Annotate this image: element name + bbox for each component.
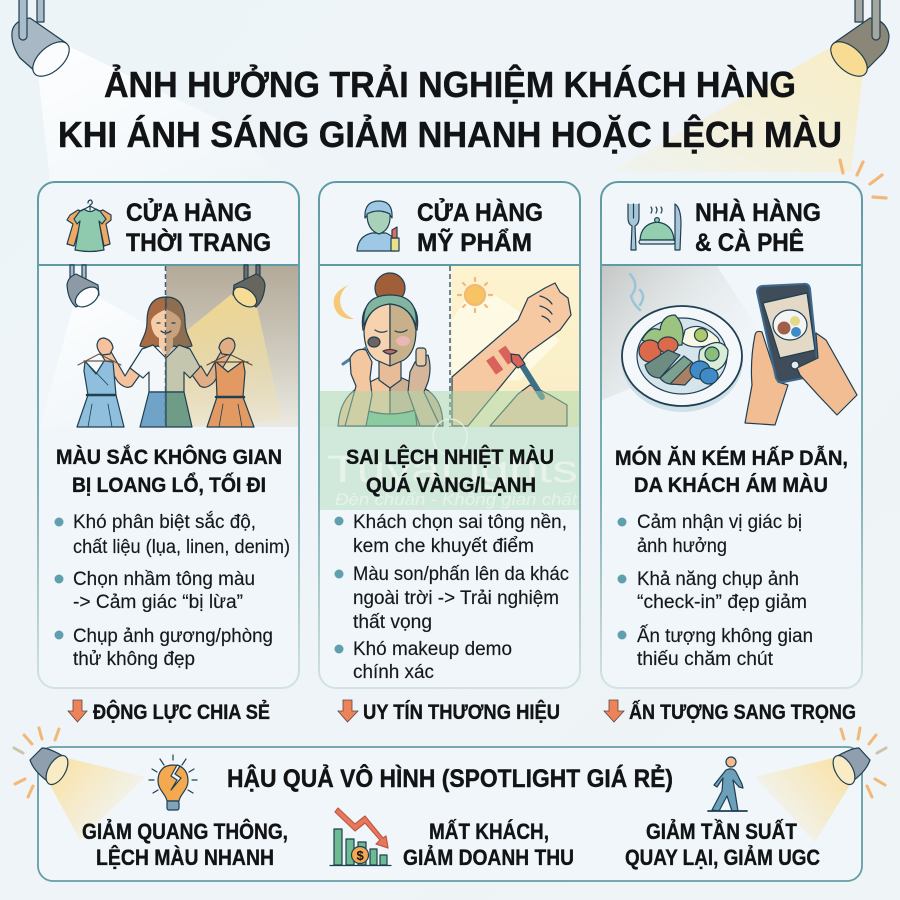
bullet list: “check-in” đẹp giảm — [637, 592, 807, 613]
shirt — [130, 345, 166, 392]
subheading — [346, 445, 554, 497]
bullet list: Chụp ảnh gương/phòng — [73, 626, 273, 647]
header text: CỬA HÀNG — [417, 197, 543, 227]
header text: NHÀ HÀNG — [695, 198, 821, 227]
bullet list: Khó makeup demo — [353, 639, 512, 660]
bullet list: Khó phân biệt sắc độ, — [73, 511, 256, 533]
bullet list: -> Cảm giác “bị lừa” — [73, 592, 243, 613]
bullet list: ngoài trời -> Trải nghiệm — [353, 588, 559, 609]
subheading: DA KHÁCH ÁM MÀU — [634, 474, 828, 497]
header text: THỜI TRANG — [126, 227, 271, 257]
subheading: QUÁ VÀNG/LẠNH — [366, 474, 536, 497]
face and neck — [151, 309, 166, 358]
icon: sun rays near title — [840, 160, 886, 198]
bullet list — [334, 512, 569, 683]
bullet list: Khả năng chụp ảnh — [637, 569, 799, 590]
image background: warm side — [451, 266, 579, 427]
icon: rays left — [14, 728, 59, 797]
bullet list — [618, 512, 813, 670]
callout: brand motivation drops: ĐỘNG LỰC CHIA SẺ — [93, 700, 270, 724]
bullet list: Ấn tượng không gian — [637, 625, 813, 647]
image background: warm side — [166, 265, 298, 427]
icon: face and lipstick — [357, 201, 399, 251]
consequence: luminous flux: GIẢM QUANG THÔNG, — [82, 819, 288, 844]
bullet list: Cảm nhận vị giác bị — [637, 512, 802, 533]
skirt — [140, 392, 166, 427]
arm right — [190, 350, 231, 387]
bullet list: chính xác — [353, 662, 434, 683]
sun — [458, 278, 492, 312]
consequence: luminous flux: LỆCH MÀU NHANH — [96, 845, 274, 870]
consequence: return frequency: GIẢM TẦN SUẤT — [646, 819, 797, 844]
spotlight beam: bottom right — [755, 758, 850, 842]
hands — [97, 338, 113, 355]
consequence: return frequency: QUAY LẠI, GIẢM UGC — [625, 845, 820, 870]
bullet list: thất vọng — [353, 612, 432, 633]
consequence: luminous flux — [82, 819, 288, 870]
panel: fashion store — [38, 182, 299, 688]
watermark band: Đèn chuẩn - Không gian chất — [335, 490, 578, 509]
bullet list: Khách chọn sai tông nền, — [353, 512, 567, 533]
illustration: food plate — [621, 274, 743, 412]
bullet list: thử không đẹp — [73, 649, 195, 670]
icon: top left spotlight — [12, 0, 75, 83]
panel background — [38, 747, 862, 881]
dress orange — [207, 361, 254, 427]
bullet list: Màu son/phấn lên da khác — [353, 564, 569, 585]
panel: restaurant and cafe — [601, 182, 862, 688]
forearm — [452, 283, 571, 426]
panel heading: HẬU QUẢ VÔ HÌNH (SPOTLIGHT GIÁ RẺ) — [227, 763, 673, 793]
image shadow — [602, 266, 765, 400]
bullet list: chất liệu (lụa, linen, denim) — [73, 537, 290, 558]
spotlight beam: top left — [38, 45, 280, 260]
icon: rays right — [841, 728, 886, 797]
consequence: lost customers — [403, 819, 574, 870]
illustration: phone in hands — [745, 284, 857, 425]
title: ẢNH HƯỞNG TRẢI NGHIỆM KHÁCH HÀNG — [104, 63, 796, 105]
icon: clothes on hangers — [67, 200, 111, 252]
hair — [140, 297, 166, 350]
icon: bottom left spotlight — [30, 748, 72, 788]
illustration: woman comparing dresses under two lights — [40, 265, 282, 427]
card background — [38, 182, 299, 688]
title: KHI ÁNH SÁNG GIẢM NHANH HOẶC LỆCH MÀU — [58, 113, 842, 155]
icon: fork, cloche and knife — [628, 204, 681, 250]
bullet list: thiếu chăm chút — [637, 649, 774, 670]
consequence: lost customers: MẤT KHÁCH, — [429, 819, 549, 844]
icon: falling revenue chart — [330, 808, 391, 866]
callout: luxury impression drops: ẤN TƯỢNG SANG TRỌNG — [629, 701, 856, 724]
subheading: MÓN ĂN KÉM HẤP DẪN, — [615, 446, 848, 470]
icon: bottom right spotlight — [829, 748, 870, 788]
spotlight beam: top right — [610, 45, 863, 172]
subheading: MÀU SẮC KHÔNG GIAN — [56, 445, 282, 469]
header text — [695, 198, 821, 257]
subheading — [615, 446, 848, 497]
header text — [417, 197, 543, 257]
consequence: return frequency — [625, 819, 820, 870]
title — [58, 63, 842, 155]
watermark band — [320, 391, 579, 510]
watermark band: TuyaLights — [327, 449, 578, 491]
subheading: SAI LỆCH NHIỆT MÀU — [346, 445, 554, 469]
subheading — [56, 445, 282, 497]
header text: & CÀ PHÊ — [695, 227, 804, 257]
shoulders — [338, 378, 390, 426]
card background — [601, 182, 862, 688]
dress blue — [77, 361, 124, 427]
panel: cosmetics store — [319, 182, 580, 688]
callout: brand reputation drops: UY TÍN THƯƠNG HIỆU — [363, 700, 560, 724]
icon: top right spotlight — [825, 0, 889, 83]
arm left — [101, 350, 142, 387]
subheading: BỊ LOANG LỔ, TỐI ĐI — [72, 473, 266, 497]
bullet list: Chọn nhầm tông màu — [73, 569, 255, 590]
bullet list — [54, 511, 290, 670]
header text: CỬA HÀNG — [126, 197, 252, 227]
icon: walking person — [708, 757, 747, 811]
icon: broken light bulb — [149, 755, 197, 810]
panel: invisible consequences — [14, 728, 886, 881]
bullet list: ảnh hưởng — [637, 536, 727, 557]
consequence: lost customers: GIẢM DOANH THU — [403, 845, 574, 870]
header text — [126, 197, 271, 257]
card background — [319, 182, 580, 688]
header text: MỸ PHẨM — [417, 227, 532, 257]
illustration: makeup comparison, moon and sun — [334, 266, 571, 427]
currency sign: $ — [356, 848, 364, 863]
spotlight beam: bottom left — [50, 758, 145, 840]
bullet list: kem che khuyết điểm — [353, 536, 534, 557]
